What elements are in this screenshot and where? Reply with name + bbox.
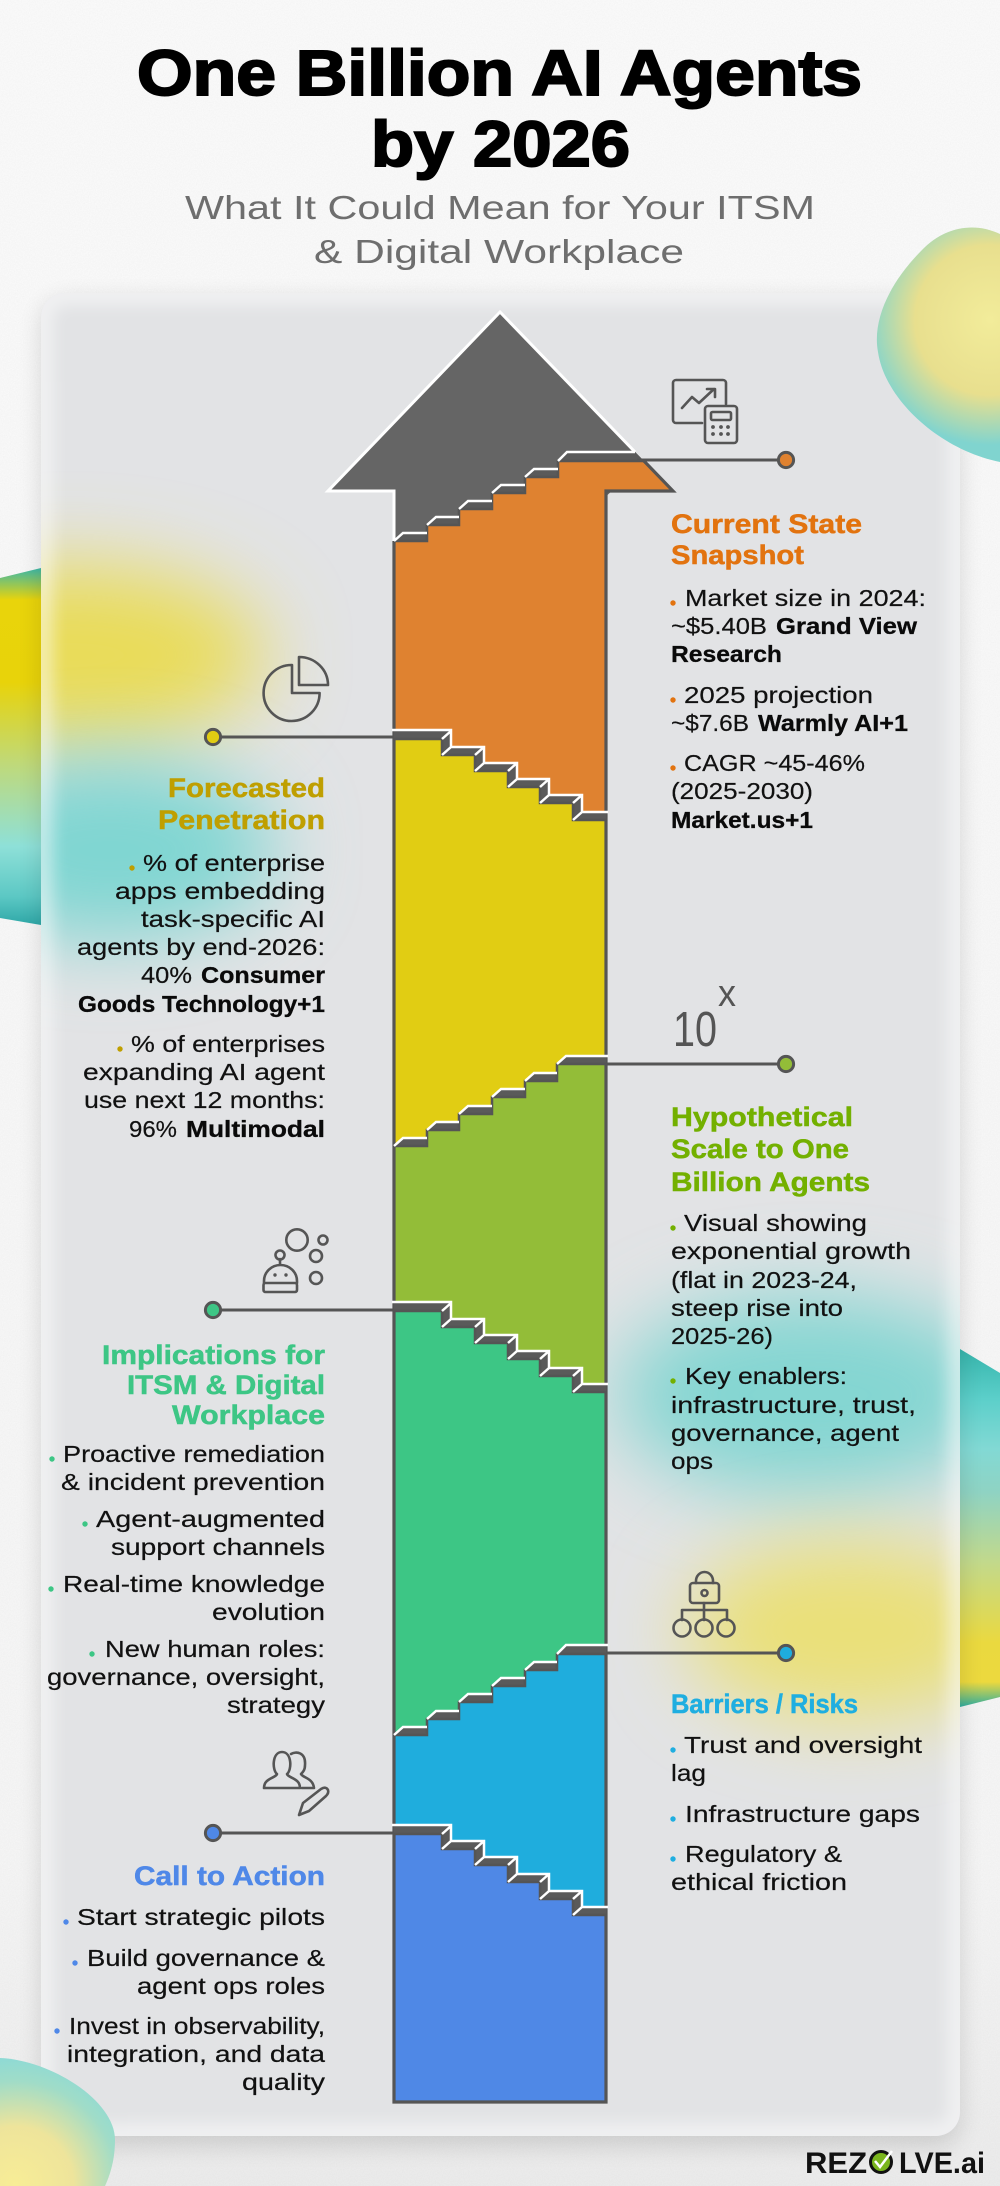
shaft outline bbox=[394, 461, 673, 2102]
panel text: hypothetical scale bbox=[670, 1102, 916, 1474]
icon: pie chart bbox=[264, 657, 328, 721]
list: forecasted penetration: use next 12 months: bbox=[84, 1087, 325, 1113]
list: current state: CAGR ~45-46% bbox=[684, 750, 865, 776]
subtitle: & Digital Workplace bbox=[314, 233, 684, 270]
panel text: call to action bbox=[54, 1861, 326, 2095]
step band 2 bbox=[392, 730, 608, 820]
list: implications: support channels bbox=[111, 1534, 325, 1560]
heading: hypothetical scale: Scale to One bbox=[671, 1134, 849, 1164]
heading: call to action: Call to Action bbox=[134, 1861, 325, 1891]
list: forecasted penetration: % of enterprise bbox=[143, 850, 325, 876]
icon: ten to the x bbox=[673, 973, 736, 1057]
connector: barriers bbox=[606, 1645, 794, 1661]
decorative blob: left edge bbox=[0, 568, 41, 925]
heading: forecasted penetration: Forecasted bbox=[168, 773, 325, 803]
segment: lime green bbox=[394, 1064, 606, 2102]
list: current state: ~$7.6B bbox=[671, 710, 749, 736]
step band 4 bbox=[392, 1302, 608, 1392]
icon: robot and bubbles bbox=[264, 1229, 328, 1292]
title bbox=[137, 37, 862, 180]
list: call to action: Build governance & bbox=[87, 1945, 325, 1971]
list: hypothetical scale: governance, agent bbox=[671, 1420, 900, 1446]
list: current state: (2025-2030) bbox=[671, 778, 813, 804]
decorative blob: right edge bbox=[960, 1349, 1000, 1707]
icon: ten to the x: 10 bbox=[673, 1003, 717, 1057]
heading: hypothetical scale bbox=[671, 1102, 870, 1197]
logo: LVE.ai bbox=[899, 2147, 985, 2180]
list: forecasted penetration: apps embedding bbox=[115, 878, 325, 904]
heading: implications: ITSM & Digital bbox=[127, 1370, 325, 1400]
heading: implications bbox=[102, 1340, 326, 1430]
icon: ten to the x: x bbox=[718, 973, 736, 1015]
connector: hypothetical scale bbox=[606, 1056, 794, 1072]
list: barriers: lag bbox=[671, 1760, 706, 1786]
list: forecasted penetration: 96% bbox=[129, 1116, 177, 1142]
list: forecasted penetration: Multimodal bbox=[186, 1116, 325, 1142]
heading: forecasted penetration: Penetration bbox=[158, 805, 325, 835]
subtitle: What It Could Mean for Your ITSM bbox=[185, 189, 815, 226]
arrow head: grey top bbox=[328, 312, 644, 541]
list: hypothetical scale: infrastructure, trust, bbox=[671, 1392, 916, 1418]
list: hypothetical scale bbox=[670, 1210, 916, 1474]
connector: current state bbox=[637, 452, 794, 468]
segment: orange bbox=[394, 461, 673, 2102]
heading: hypothetical scale: Hypothetical bbox=[671, 1102, 853, 1132]
list: barriers: Regulatory & bbox=[685, 1841, 842, 1867]
panel shadow bbox=[41, 300, 960, 2146]
list: implications: New human roles: bbox=[105, 1636, 325, 1662]
list: call to action: Invest in observability, bbox=[69, 2013, 325, 2039]
heading: implications: Workplace bbox=[172, 1400, 325, 1430]
list: call to action: quality bbox=[242, 2069, 325, 2095]
heading: hypothetical scale: Billion Agents bbox=[671, 1167, 870, 1197]
heading: forecasted penetration bbox=[158, 773, 325, 835]
list: hypothetical scale: exponential growth bbox=[671, 1238, 911, 1264]
list: current state: Grand View bbox=[776, 613, 918, 639]
list: hypothetical scale: Visual showing bbox=[684, 1210, 867, 1236]
subtitle bbox=[185, 189, 815, 270]
list: hypothetical scale: (flat in 2023-24, bbox=[671, 1267, 857, 1293]
icon: chart and calculator bbox=[673, 380, 737, 443]
title: by 2026 bbox=[371, 108, 630, 180]
list: implications: Proactive remediation bbox=[63, 1441, 325, 1467]
list: barriers: Infrastructure gaps bbox=[685, 1801, 920, 1827]
connector: implications bbox=[205, 1302, 394, 1318]
list: current state: Research bbox=[671, 641, 782, 667]
list: call to action bbox=[54, 1904, 326, 2095]
list: barriers: ethical friction bbox=[671, 1869, 847, 1895]
list: barriers: Trust and oversight bbox=[684, 1732, 923, 1758]
list: barriers bbox=[670, 1732, 923, 1895]
list: forecasted penetration: % of enterprises bbox=[131, 1031, 325, 1057]
list: hypothetical scale: Key enablers: bbox=[685, 1363, 847, 1389]
list: forecasted penetration: task-specific AI bbox=[141, 906, 325, 932]
list: implications: governance, oversight, bbox=[47, 1664, 325, 1690]
list: forecasted penetration: Consumer bbox=[201, 962, 325, 988]
segment: blue bbox=[394, 1834, 606, 2102]
list: call to action: integration, and data bbox=[67, 2041, 326, 2067]
list: implications: Agent-augmented bbox=[96, 1506, 325, 1532]
segment: yellow bbox=[394, 739, 606, 2102]
list: forecasted penetration: 40% bbox=[141, 962, 192, 988]
step band 6 bbox=[392, 1825, 608, 1915]
list: current state: Warmly AI+1 bbox=[758, 710, 908, 736]
connector: forecasted penetration bbox=[205, 729, 394, 745]
heading: current state: Snapshot bbox=[671, 540, 804, 570]
list: call to action: Start strategic pilots bbox=[77, 1904, 325, 1930]
list: current state: Market size in 2024: bbox=[685, 585, 926, 611]
list: current state: Market.us+1 bbox=[671, 807, 813, 833]
step band 3 bbox=[394, 1056, 608, 1146]
logo: REZ bbox=[805, 2147, 867, 2180]
title: One Billion AI Agents bbox=[137, 37, 862, 109]
list: hypothetical scale: steep rise into bbox=[671, 1295, 843, 1321]
list: current state: 2025 projection bbox=[684, 682, 873, 708]
segment: sky blue bbox=[394, 1654, 606, 2102]
panel text: current state snapshot bbox=[670, 509, 926, 833]
list: implications: Real-time knowledge bbox=[63, 1571, 325, 1597]
icon: lock and network bbox=[674, 1572, 734, 1636]
list: call to action: agent ops roles bbox=[137, 1973, 325, 1999]
decorative blob: top right bbox=[877, 227, 1000, 462]
panel text: implications bbox=[47, 1340, 326, 1718]
icon: people and pencil bbox=[264, 1752, 328, 1815]
heading: current state: Current State bbox=[671, 509, 862, 539]
decorative blob: bottom left bbox=[0, 2058, 115, 2186]
list: forecasted penetration: expanding AI agent bbox=[83, 1059, 326, 1085]
heading: implications: Implications for bbox=[102, 1340, 326, 1370]
segment: emerald bbox=[394, 1311, 606, 2102]
staircase arrow bbox=[328, 312, 673, 2102]
list: current state bbox=[670, 585, 926, 833]
arrow head white outline bbox=[328, 312, 635, 541]
list: forecasted penetration: Goods Technology+1 bbox=[78, 991, 325, 1017]
heading: barriers: Barriers / Risks bbox=[671, 1689, 858, 1719]
list: current state: ~$5.40B bbox=[671, 613, 767, 639]
list: implications: evolution bbox=[212, 1599, 325, 1625]
panel text: forecasted penetration bbox=[77, 773, 326, 1142]
list: implications: strategy bbox=[227, 1692, 325, 1718]
step band 5 bbox=[394, 1645, 608, 1735]
step band 1 bbox=[394, 452, 644, 541]
list: implications bbox=[47, 1441, 325, 1718]
logo bbox=[805, 2147, 985, 2180]
list: hypothetical scale: 2025-26) bbox=[671, 1323, 773, 1349]
connector: call to action bbox=[205, 1825, 394, 1841]
list: forecasted penetration bbox=[77, 850, 326, 1142]
list: forecasted penetration: agents by end-2026: bbox=[77, 934, 325, 960]
panel text: barriers and risks bbox=[670, 1689, 923, 1895]
list: hypothetical scale: ops bbox=[671, 1448, 713, 1474]
list: implications: & incident prevention bbox=[61, 1469, 325, 1495]
heading: current state bbox=[671, 509, 862, 570]
